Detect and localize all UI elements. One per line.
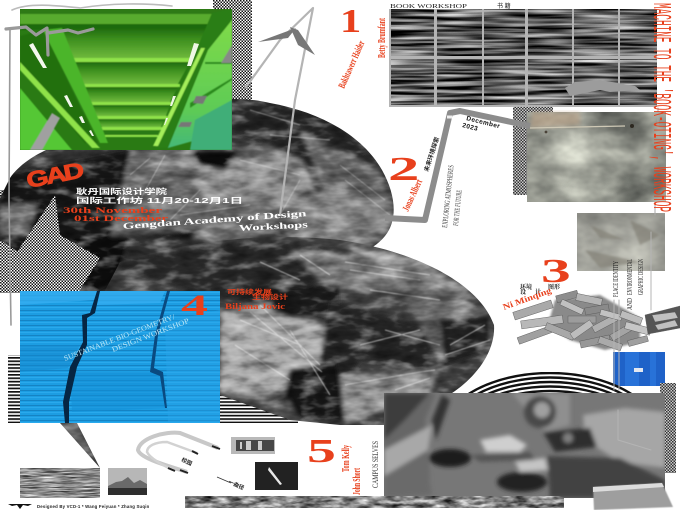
icon: paper plane fold [258, 27, 315, 55]
dates red second line: 01st December [74, 213, 168, 223]
photo: blue sheet [613, 352, 665, 386]
subtitle and: AND [625, 298, 634, 310]
Chinese dates: 国际工作坊 11月20-12月1日 [76, 196, 243, 205]
concentric arcs [468, 372, 632, 393]
lower plastic bag circle [50, 230, 500, 470]
Chinese: bio design: 生物设计 [252, 292, 289, 301]
name: John Short: John Short [352, 468, 363, 495]
school name: Gengdan Academy of Design [122, 208, 307, 231]
Chinese: graphic: 图形 [548, 283, 560, 291]
stone strip bottom [185, 496, 564, 508]
photo: blue foam boards [20, 291, 220, 423]
Chinese: environmental graphic: 环境 [520, 283, 532, 291]
heading: book workshop Chinese: 书 籍 [497, 2, 511, 10]
checker block left [0, 190, 100, 293]
subtitle graphic design: GRAPHIC DESIGN [636, 259, 645, 295]
workshops: Workshops [239, 219, 309, 233]
number 1: 1 [340, 3, 361, 40]
name: Bakhtawerr Haider: Bakhtawerr Haider [337, 39, 368, 90]
small photo: building [108, 468, 147, 495]
number 2: 2 [388, 150, 419, 187]
upper plastic bag circle [0, 99, 394, 291]
photo: dusty ground [577, 213, 665, 271]
Chinese: future environment: 未来环境探索 [422, 136, 441, 173]
subtitle environmental: ENVIRONMENTAL [625, 259, 634, 295]
pipe [385, 111, 530, 220]
number 5: 5 [307, 433, 336, 470]
stone slab [593, 483, 673, 510]
checker strip by concrete [513, 107, 553, 195]
checker triangle over bag [0, 195, 100, 293]
bricks pile [513, 290, 680, 351]
logo GAD: GAD [24, 158, 86, 193]
year: 2023 [462, 122, 479, 133]
white label box [340, 425, 384, 495]
photo: dark knife [255, 462, 298, 490]
Chinese label: campus: 校园 [180, 456, 194, 468]
photo: green ceiling [20, 9, 232, 150]
subtitle future: FOR THE FUTURE [451, 189, 464, 226]
dates red: 30th November [63, 205, 162, 215]
checker strip right [660, 383, 676, 473]
label line with Chinese [217, 477, 246, 492]
subtitle exploring: EXPLORING ATMOSPHERES [440, 165, 456, 228]
footer credit: Designed By VCD-1 * Wang Feiyuan * Zhang Suqin [37, 504, 150, 509]
Chinese: sustainable: 可持续发展 [227, 287, 273, 296]
heading: book workshop: BOOK WORKSHOP [390, 4, 468, 10]
photo: concrete wall [527, 112, 666, 202]
subtitle design workshop: DESIGN WORKSHOP [110, 316, 190, 354]
label line with Chinese: 一曲径 [227, 478, 246, 492]
subtitle place identity: PLACE IDENTITY [611, 261, 620, 297]
name: Ni Minqing: Ni Minqing [501, 285, 553, 312]
photo: grey mirrored portrait [384, 393, 665, 498]
stripe band behind blue photo [8, 355, 298, 423]
subtitle sustainable: SUSTAINABLE BIO-GEOMETRY/ [62, 312, 177, 363]
photo: bent tube object [138, 433, 220, 473]
Chinese: design: 设 计 [520, 288, 541, 296]
number 4: 4 [181, 289, 208, 322]
name: Jonas Albert: Jonas Albert [401, 177, 425, 213]
grey text strip image [20, 468, 100, 498]
number 3: 3 [541, 253, 571, 290]
Chinese title: 耿丹国际设计学院 [76, 187, 168, 196]
photo: small grey object [231, 437, 275, 454]
footer logo [8, 504, 32, 509]
name: Biljana Jovic: Biljana Jovic [225, 302, 286, 311]
December: December [466, 115, 501, 130]
name: Tom Kelly: Tom Kelly [341, 445, 352, 472]
photo: book shelves [389, 9, 657, 107]
subtitle campus selves: CAMPUS SELVES [371, 441, 380, 488]
checker strip top [213, 0, 252, 104]
